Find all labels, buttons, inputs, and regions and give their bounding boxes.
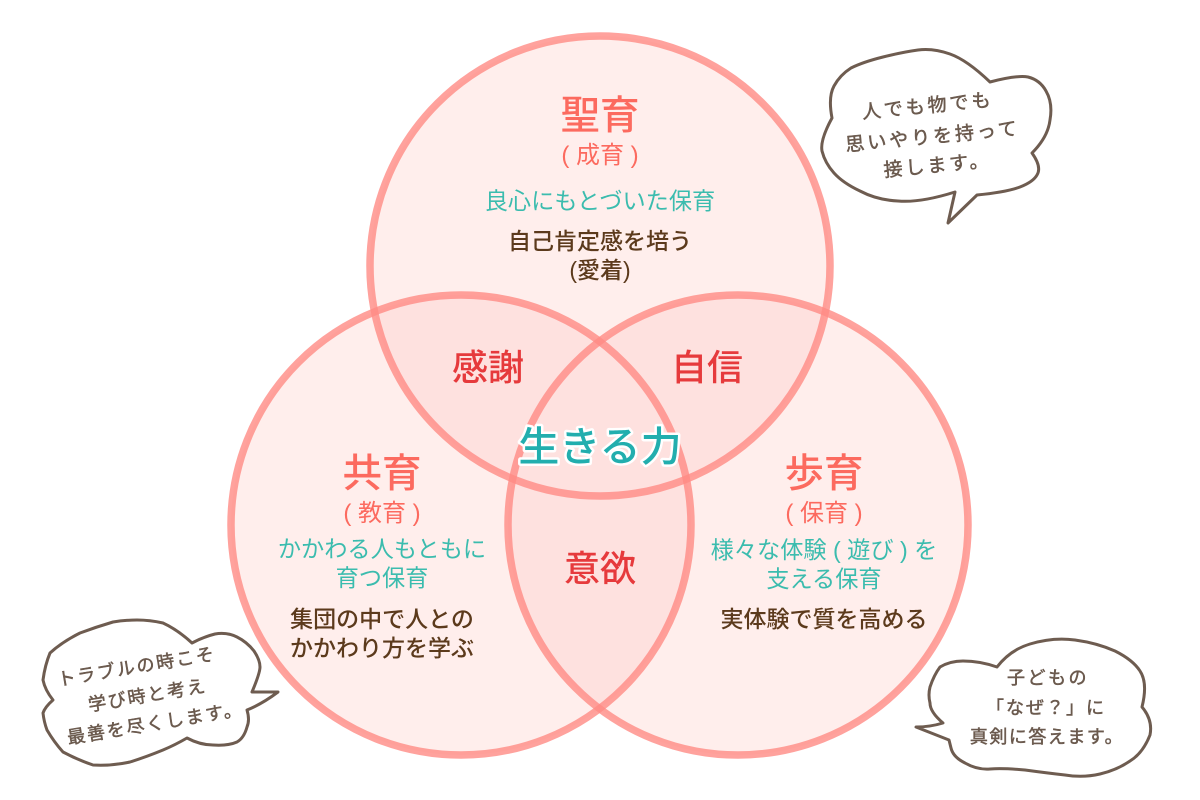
subheading: 教育: ( 教育 ) [343,500,421,527]
teal text: 様々な体験(遊び)を: 様々な体験 ( 遊び ) を [711,537,937,563]
bubble text: 「なぜ？」に [986,694,1106,720]
speech bubble: bottom right [916,639,1151,776]
bubble text: 真剣に答えます。 [970,723,1124,749]
bubble text: トラブルの時こそ [55,640,218,692]
speech bubble: top right [822,50,1051,223]
bubble text: 接します。 [882,146,992,183]
bubble text [55,637,245,750]
teal text line 2: 育つ保育 [336,565,428,591]
subheading: 成育: ( 成育 ) [561,142,639,169]
body text: 愛着: (愛着) [569,257,631,283]
panel: 聖育 [485,94,715,283]
speech bubble: bottom left [43,620,278,765]
label: 意欲: 意欲 [564,548,636,589]
body text: 実体験で質を高める: 実体験で質を高める [720,606,928,632]
bubble text [841,83,1024,186]
heading: 共育: 共育 [342,452,422,496]
teal text line 2: 支える保育 [766,566,882,592]
venn diagram circles [231,36,968,755]
heading: 聖育: 聖育 [560,94,640,138]
bubble text: 学び時と考え [86,672,209,717]
panel: 歩育 [711,452,937,632]
bubble text [970,664,1124,749]
body text: 自己肯定感を培う: 自己肯定感を培う [508,228,692,254]
subheading: 保育: ( 保育 ) [785,500,863,527]
teal text: かかわる人もともに育つ保育: かかわる人もともに [278,536,486,562]
bubble text: 思いやりを持って [844,114,1021,157]
center label: 生きる力: 生きる力 [518,424,682,470]
label: 感謝: 感謝 [452,347,524,388]
bubble text: 子どもの [1007,664,1089,690]
teal text: 良心にもとづいた保育: 良心にもとづいた保育 [485,188,715,214]
bubble text: 人でも物でも [861,85,995,125]
body text: かかわり方を学ぶ: かかわり方を学ぶ [290,635,474,661]
body text: 集団の中で人との: 集団の中で人との [290,606,474,632]
label: 自信: 自信 [671,347,743,388]
bubble text: 最善を尽くします。 [65,695,245,750]
heading: 歩育: 歩育 [784,452,864,496]
panel: 共育 [278,452,486,661]
